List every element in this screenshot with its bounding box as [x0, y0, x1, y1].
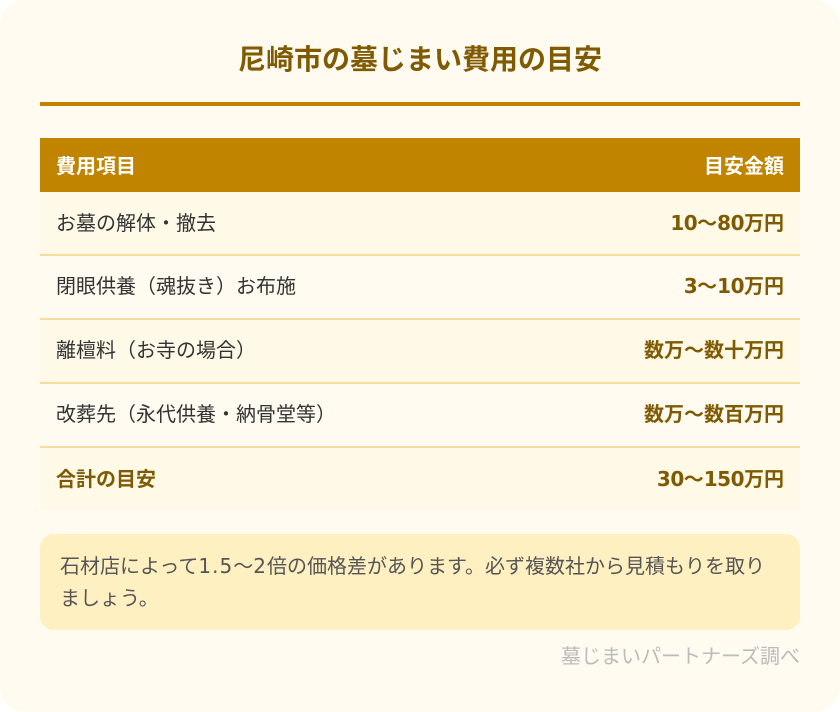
row: total: 合計の目安: [56, 466, 156, 490]
row: demolition: [40, 192, 800, 256]
cost table: [40, 138, 800, 490]
row: eye-closing service: 3～10万円: [684, 274, 784, 298]
row: eye-closing service: [40, 256, 800, 320]
row: new resting place: 数万～数百万円: [644, 402, 784, 426]
row: demolition: 10～80万円: [670, 210, 784, 234]
row: new resting place: [40, 384, 800, 448]
source credit: 墓じまいパートナーズ調べ: [561, 644, 800, 668]
row: eye-closing service: 閉眼供養（魂抜き）お布施: [56, 274, 296, 298]
row: temple leaving fee: 離檀料（お寺の場合）: [56, 338, 256, 362]
title underline: [40, 102, 800, 106]
row: demolition: お墓の解体・撤去: [56, 206, 216, 236]
title: 尼崎市の墓じまい費用の目安: [238, 43, 602, 76]
table header: 目安金額: [704, 154, 784, 178]
row: new resting place: 改葬先（永代供養・納骨堂等）: [56, 398, 336, 426]
table header: 費用項目: [56, 154, 136, 178]
row: total: [40, 448, 800, 510]
row: total: 30～150万円: [657, 466, 784, 490]
callout background: [40, 534, 800, 630]
table header: [40, 138, 800, 192]
row: temple leaving fee: [40, 320, 800, 384]
row: temple leaving fee: 数万～数十万円: [644, 338, 784, 362]
callout note: 石材店によって1.5～2倍の価格差があります。必ず複数社から見積もりを取りましょう。: [60, 554, 765, 610]
